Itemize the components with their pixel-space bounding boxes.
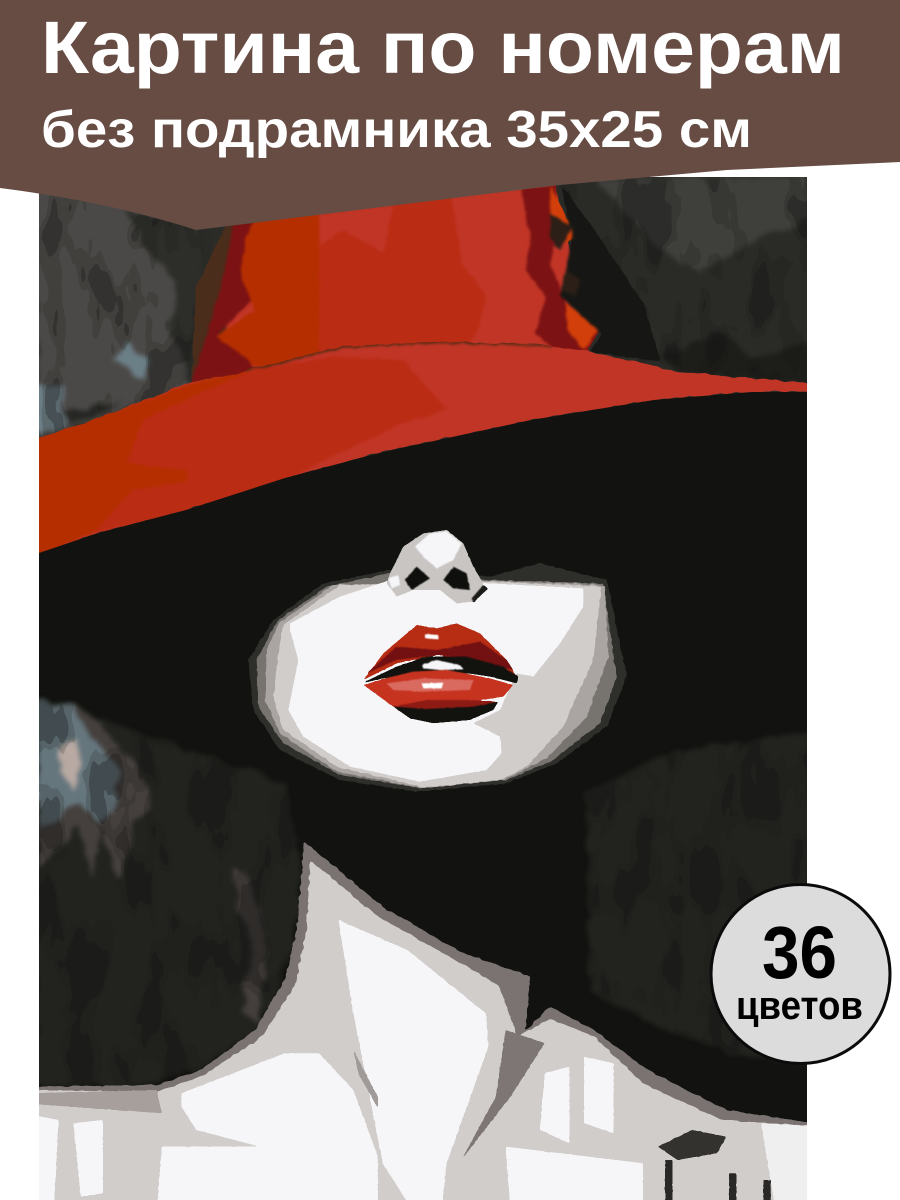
badge number: 36 [762, 911, 837, 994]
chest: light grey [24, 860, 825, 1200]
painting: woman in red hat [24, 177, 830, 1200]
background: right grey brushwork [560, 177, 816, 387]
face: white skin [288, 580, 583, 782]
chest: shadow edge [39, 842, 807, 1126]
lips [362, 623, 518, 723]
hair: blue-grey highlight [36, 698, 119, 827]
black hat shadow [39, 392, 810, 1200]
chest and shirt [24, 842, 825, 1200]
banner [0, 0, 900, 230]
hair: brown strands [36, 700, 152, 880]
title: Картина по номерам [41, 6, 845, 89]
hair: side highlight [231, 867, 269, 1023]
hair: left side [36, 697, 302, 1087]
background: left grey brushwork [39, 194, 193, 438]
hat brim [37, 343, 811, 555]
nose [387, 530, 488, 603]
face: shadow layers [248, 563, 627, 792]
badge label: цветов [736, 984, 863, 1028]
chest: dark folds [24, 1030, 771, 1200]
hat crown [191, 183, 661, 387]
face [248, 530, 627, 792]
badge: 36 colours [711, 884, 890, 1064]
hair: right side [586, 732, 807, 1058]
subtitle: без подрамника 35х25 см [41, 101, 752, 159]
chest: white areas [24, 920, 825, 1200]
